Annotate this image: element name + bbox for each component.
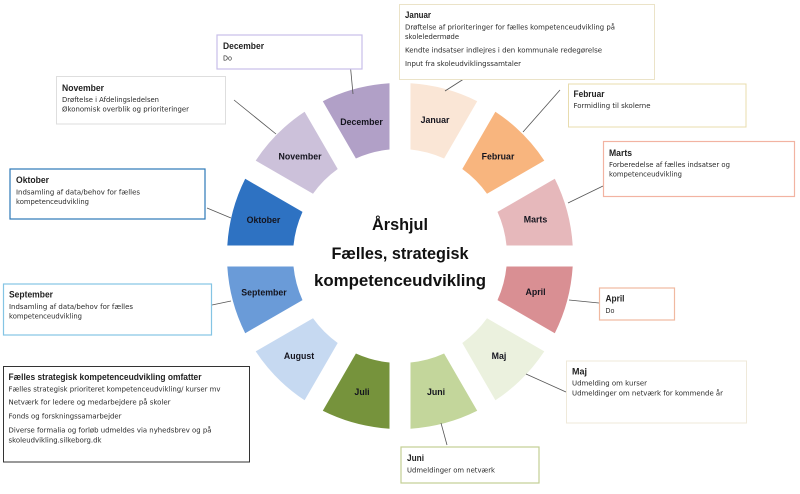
segment: Februar (462, 112, 544, 194)
segment: December (323, 83, 390, 158)
panel: Februar: Februar (574, 89, 605, 100)
panel: November: Økonomisk overblik og prioriteringer (62, 106, 189, 114)
panel: Fælles strategisk kompetenceudvikling omfatter: Fælles strategisk kompetenceudvikling omfatter (8, 372, 202, 383)
segment: Maj (462, 318, 544, 400)
panel: Juni: Juni (407, 453, 424, 464)
segment: Februar: Februar (482, 152, 515, 162)
panel: Marts (604, 142, 794, 196)
segment: Januar: Januar (421, 115, 450, 125)
segment: Oktober: Oktober (247, 215, 281, 225)
panel: December: Do (223, 54, 232, 62)
panel: December (217, 35, 362, 69)
segment: Januar (410, 83, 477, 158)
connector: Oktober (207, 208, 231, 218)
segment: Juli (323, 354, 390, 429)
center title: Fælles, strategisk (332, 244, 469, 263)
panel: Maj: Udmeldinger om netværk for kommende år (572, 388, 723, 398)
panel: September: kompetenceudvikling (9, 312, 82, 320)
segment: December: December (340, 117, 383, 127)
panel: Fælles strategisk kompetenceudvikling omfatter (4, 366, 250, 462)
panel: Fælles strategisk kompetenceudvikling omfatter: Fonds og forskningssamarbejder (8, 412, 122, 420)
wheel: twelve month segments (227, 83, 573, 429)
panel: Februar (568, 84, 746, 127)
segment: Juli: Juli (354, 387, 370, 397)
segment: Juni (410, 354, 477, 429)
connector: Marts (568, 186, 603, 203)
panel: Januar (400, 4, 654, 80)
segment: April (498, 266, 573, 333)
panel: Oktober (10, 169, 205, 219)
panel: Fælles strategisk kompetenceudvikling omfatter: skoleudvikling.silkeborg.dk (8, 436, 102, 444)
panel: November: November (62, 83, 104, 94)
panel: Maj: Maj (572, 366, 587, 378)
panel: Juni: Udmeldinger om netværk (407, 466, 495, 474)
panel: December: December (223, 41, 264, 52)
segment: Maj: Maj (492, 351, 506, 361)
connector: Januar (445, 75, 470, 91)
panel: September (4, 284, 212, 335)
segment: Juni: Juni (427, 387, 445, 397)
connector: December (350, 62, 353, 94)
panel: Marts: Forberedelse af fælles indsatser og (609, 161, 730, 169)
center title: Årshjul (372, 215, 428, 234)
center title (314, 215, 486, 290)
panel: April: Do (606, 307, 614, 315)
segment: Marts: Marts (524, 214, 547, 224)
segment: September (227, 266, 302, 333)
panel: Januar: Input fra skoleudviklingssamtaler (405, 60, 521, 68)
panel: Juni (401, 447, 539, 483)
connector: September (212, 301, 231, 305)
connector: November (234, 100, 276, 134)
panel: Oktober: kompetenceudvikling (16, 198, 89, 206)
panel: April (600, 288, 674, 320)
connector: April (569, 300, 599, 303)
panel: Maj (566, 361, 746, 423)
panel: Oktober: Indsamling af data/behov for fælles (16, 188, 140, 196)
panel: Maj: Udmelding om kurser (572, 380, 647, 388)
panel: Fælles strategisk kompetenceudvikling omfatter: Netværk for ledere og medarbejdere på skoler (8, 398, 171, 406)
panel: Januar: skoleledermøde (405, 33, 459, 41)
segment: November: November (278, 152, 322, 162)
panel: Januar: Januar (405, 10, 431, 21)
panel: Februar: Formidling til skolerne (574, 102, 650, 110)
panel: September: Indsamling af data/behov for fælles (9, 303, 133, 311)
segment: August (256, 318, 338, 400)
segment: November (256, 112, 338, 194)
panel: November: Drøftelse i Afdelingsledelsen (62, 96, 159, 104)
panel: November (56, 76, 226, 124)
panel: Oktober: Oktober (16, 175, 49, 186)
panel: Januar: Drøftelse af prioriteringer for fælles kompetenceudvikling på (405, 22, 615, 32)
segment: August: August (284, 351, 314, 361)
segment: April: April (525, 287, 546, 297)
segment: Marts (498, 179, 573, 246)
connector: Juni (441, 423, 447, 445)
connector: Februar (523, 90, 560, 132)
panel: April: April (606, 294, 624, 304)
panel: Januar: Kendte indsatser indlejres i den kommunale redegørelse (405, 46, 602, 54)
center title: kompetenceudvikling (314, 271, 486, 290)
panel: Fælles strategisk kompetenceudvikling omfatter: Diverse formalia og forløb udmeldes via nyhedsbrev og på (8, 426, 212, 434)
segment: September: September (241, 288, 287, 298)
panel: Marts: kompetenceudvikling (609, 170, 682, 178)
panel: Fælles strategisk kompetenceudvikling omfatter: Fælles strategisk prioriteret kompetenceudvikling/ kurser mv (8, 386, 221, 394)
panel: September: September (9, 290, 53, 300)
segment: Oktober (227, 179, 302, 246)
connector: Maj (526, 374, 566, 392)
panel: Marts: Marts (609, 148, 632, 159)
